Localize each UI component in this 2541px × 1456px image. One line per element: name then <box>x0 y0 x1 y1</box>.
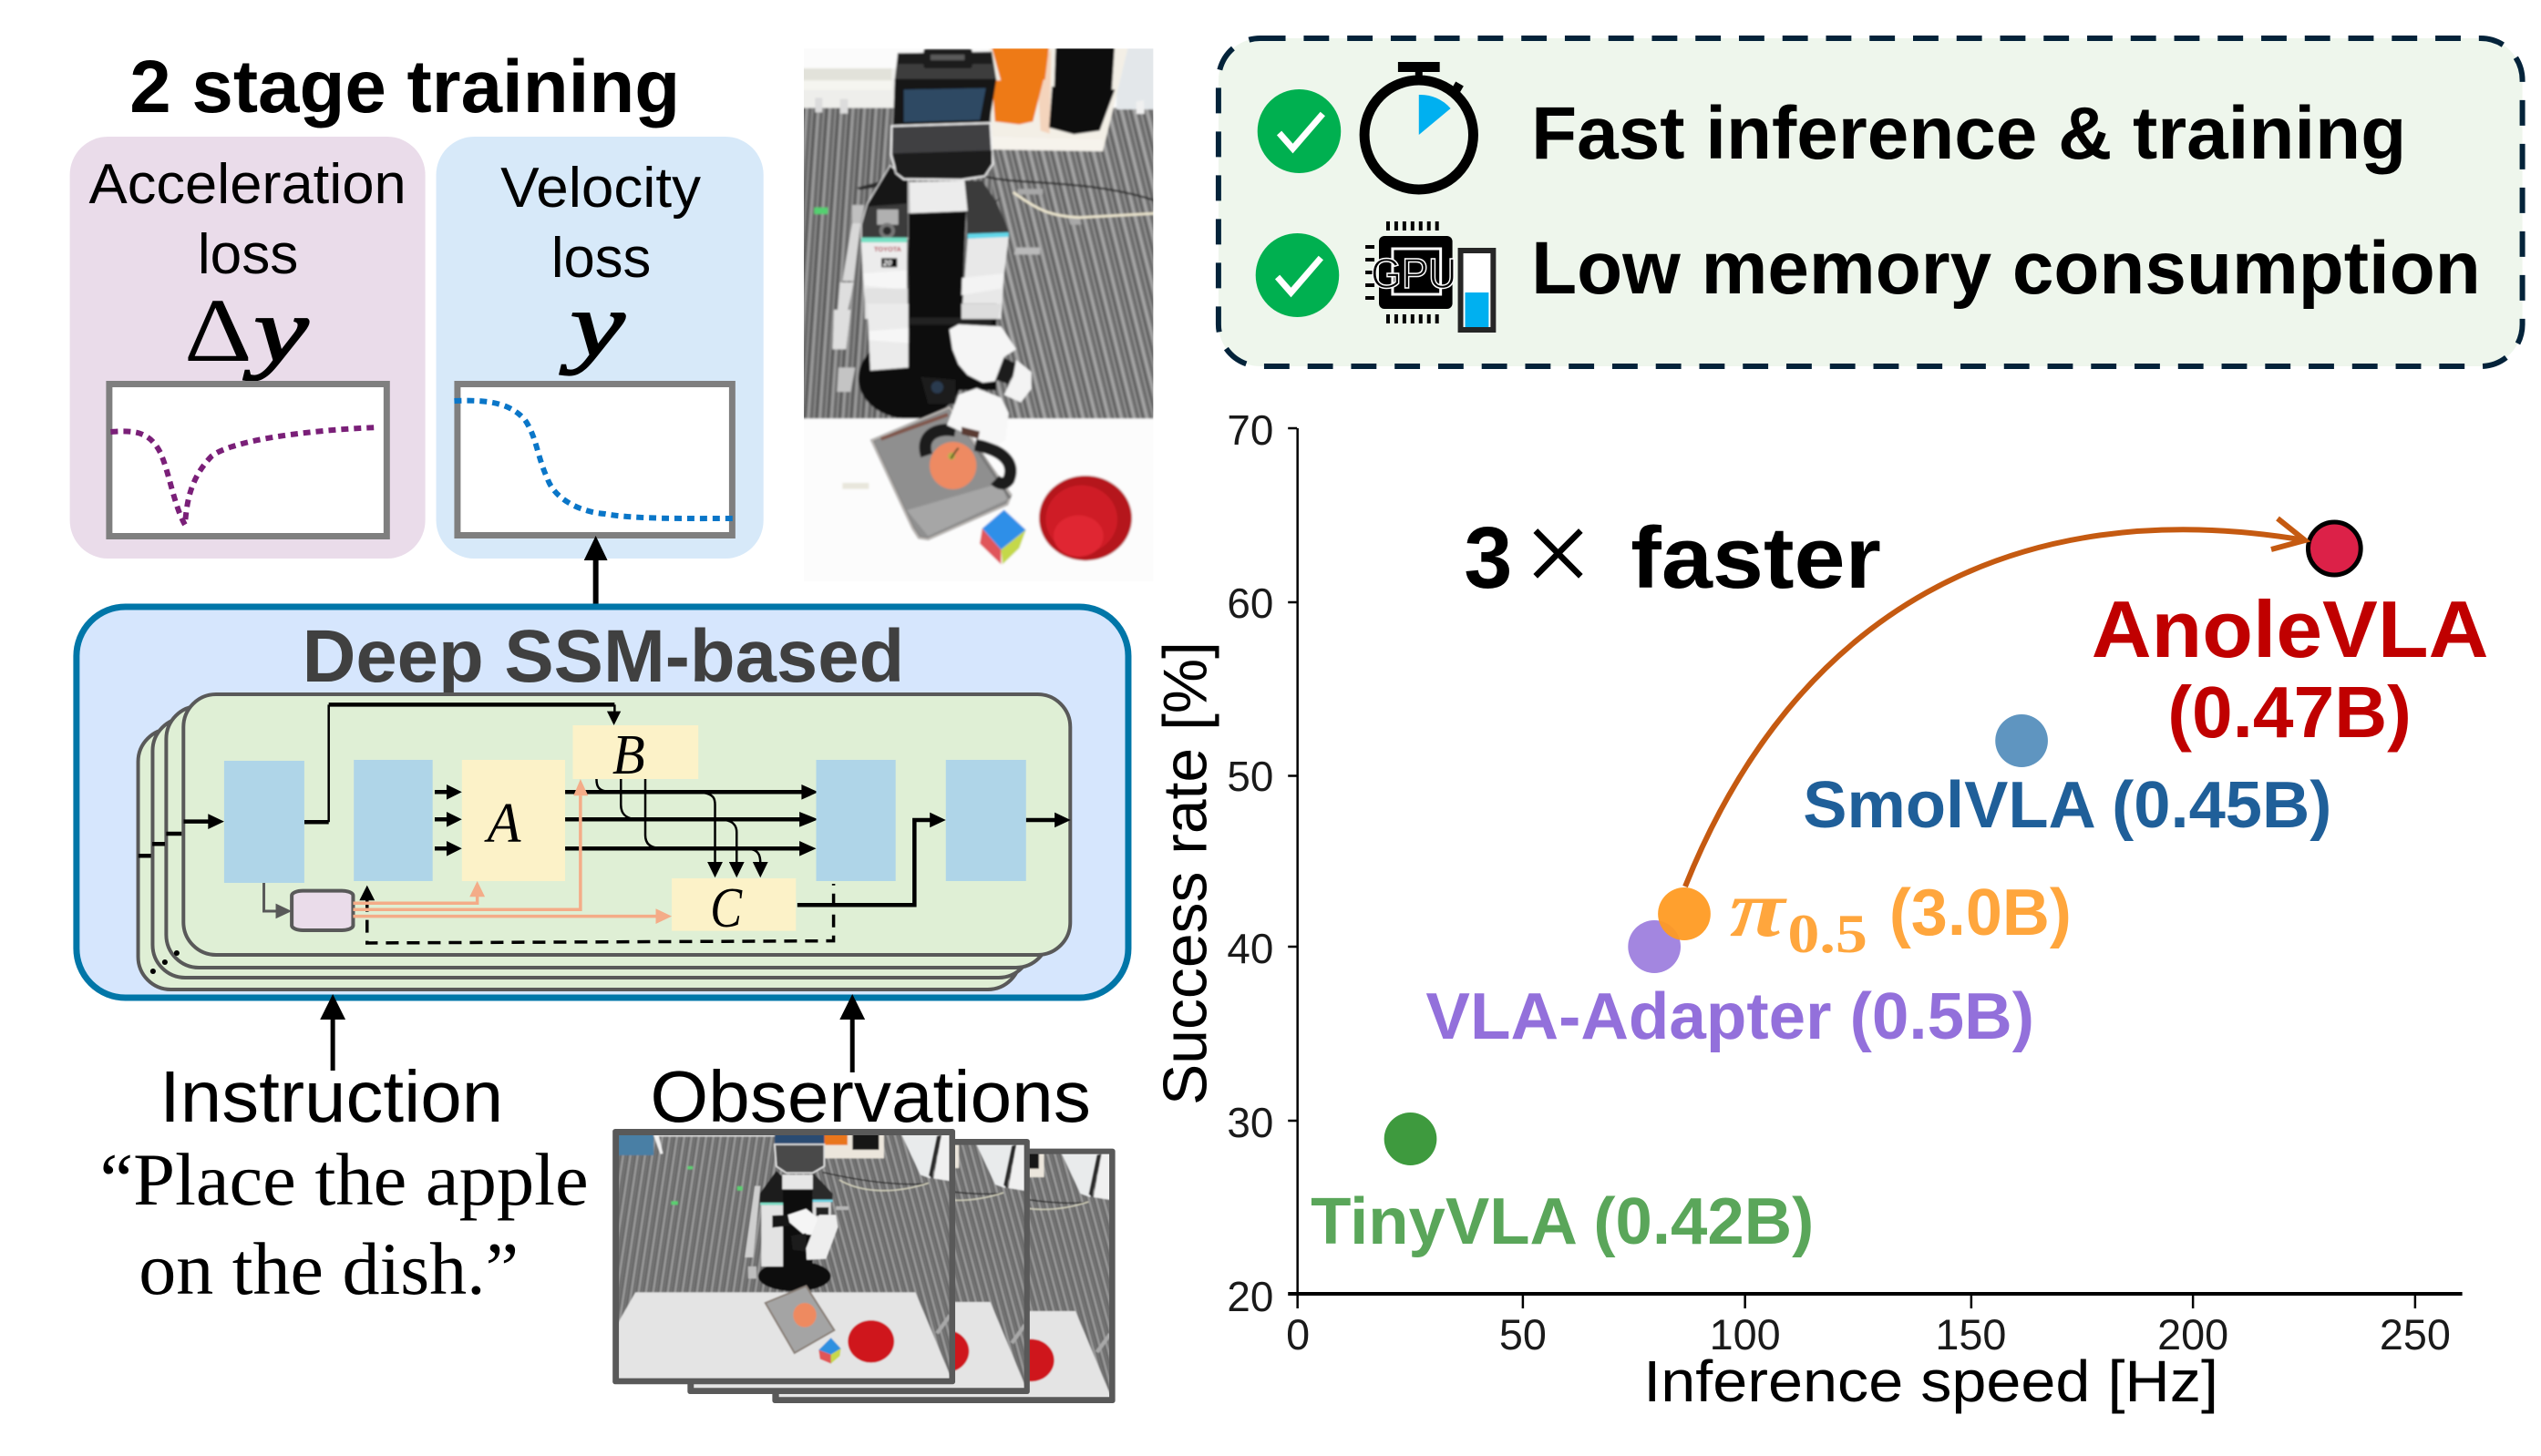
arrow: model to velocity chart <box>584 536 608 605</box>
icon: check 1 <box>1258 89 1341 173</box>
label: pi 0.5 <box>1730 865 2072 964</box>
panel: benefits <box>1219 38 2523 366</box>
formula: delta y <box>184 280 309 381</box>
label: TinyVLA: TinyVLA (0.42B) <box>1311 1185 1814 1258</box>
label: A: A <box>484 793 521 855</box>
x tick labels: 0 <box>1286 1311 1310 1359</box>
x tick labels: 250 <box>2380 1311 2451 1359</box>
point: TinyVLA <box>1384 1113 1436 1165</box>
heading: Acceleration loss: loss <box>198 223 298 286</box>
label: AnoleVLA: AnoleVLA <box>2092 585 2488 674</box>
y tick labels: 60 <box>1227 579 1273 627</box>
label: pi 0.5: (3.0B) <box>1889 877 2072 949</box>
axes <box>1288 428 2463 1308</box>
annotation: 3x faster: × <box>1524 486 1592 620</box>
heading: Acceleration loss: Acceleration <box>89 153 406 216</box>
text block: instruction sentence: “Place the apple <box>99 1138 589 1221</box>
label: AnoleVLA <box>2092 585 2488 753</box>
label: pi 0.5: 0.5 <box>1787 904 1867 964</box>
y tick labels: 50 <box>1227 753 1273 800</box>
photo: robot with tray <box>797 43 1162 590</box>
photo: robot with tray: TOYOTA <box>874 247 901 253</box>
annotation: 3x faster: faster <box>1631 509 1881 607</box>
y tick labels: 70 <box>1227 406 1273 454</box>
annotation: 3x faster <box>1464 486 1881 620</box>
text block: instruction sentence: on the dish.” <box>139 1227 519 1310</box>
text: fast inference: Fast inference & training <box>1531 92 2406 175</box>
icon: GPU chip and battery: GPU <box>1371 250 1457 297</box>
icon: GPU chip and battery <box>1365 221 1493 330</box>
heading: Velocity loss: Velocity <box>500 157 701 220</box>
chart: acceleration curve <box>109 385 386 536</box>
y tick labels: 40 <box>1227 925 1273 972</box>
label: AnoleVLA: (0.47B) <box>2167 672 2412 753</box>
label: VLA-Adapter: VLA-Adapter (0.5B) <box>1425 980 2034 1053</box>
label: Instruction: Instruction <box>159 1056 503 1137</box>
point: pi 0.5 <box>1658 887 1711 940</box>
point: AnoleVLA <box>2308 522 2361 575</box>
formula: y: y <box>560 274 625 375</box>
label: B: B <box>612 724 645 786</box>
point: SmolVLA <box>1995 714 2048 767</box>
arrow: instruction to model <box>320 994 345 1071</box>
text block: instruction sentence <box>99 1138 589 1310</box>
label: pi 0.5: π <box>1730 865 1787 953</box>
plot elements <box>1152 406 2488 1414</box>
icon: stopwatch <box>1364 62 1473 190</box>
x tick labels: 50 <box>1499 1311 1547 1359</box>
x tick labels: 200 <box>2157 1311 2228 1359</box>
label: Observations: Observations <box>650 1056 1091 1137</box>
panel: Deep SSM-based <box>77 607 1128 998</box>
formula: delta y: Δ <box>184 280 252 381</box>
x tick labels: 100 <box>1710 1311 1781 1359</box>
text: low memory: Low memory consumption <box>1531 227 2481 310</box>
diagram: stacked state-space blocks <box>139 694 1071 989</box>
image stack: observations <box>612 1129 1116 1403</box>
y tick labels: 30 <box>1227 1099 1273 1146</box>
heading: Acceleration loss <box>89 153 406 286</box>
x tick labels: 150 <box>1935 1311 2006 1359</box>
title: 2 stage training: 2 stage training <box>129 46 680 128</box>
y tick labels: 20 <box>1227 1273 1273 1320</box>
chart: velocity curve <box>454 385 736 536</box>
x axis title: Inference speed [Hz] <box>1643 1348 2218 1414</box>
panel: velocity loss <box>437 137 764 559</box>
panel: acceleration loss <box>70 137 426 559</box>
y axis title: Success rate [%] <box>1152 641 1220 1105</box>
arrow: speed improvement <box>1685 518 2305 887</box>
formula: delta y: y <box>242 280 309 381</box>
x tick labels <box>1286 1311 2451 1359</box>
annotation: 3x faster: 3 <box>1464 509 1512 607</box>
label: C: C <box>710 877 743 939</box>
photo: robot with tray: 20 <box>882 259 892 268</box>
heading: Deep SSM-based: Deep SSM-based <box>303 615 904 698</box>
arrow: observations to model <box>839 994 865 1072</box>
heading: Velocity loss: loss <box>551 227 651 290</box>
label: SmolVLA: SmolVLA (0.45B) <box>1803 769 2331 842</box>
point: VLA-Adapter <box>1628 920 1681 973</box>
chart: success rate vs inference speed <box>1152 406 2488 1414</box>
heading: Velocity loss <box>500 157 701 290</box>
y tick labels <box>1227 406 1273 1320</box>
icon: check 2 <box>1256 233 1339 317</box>
